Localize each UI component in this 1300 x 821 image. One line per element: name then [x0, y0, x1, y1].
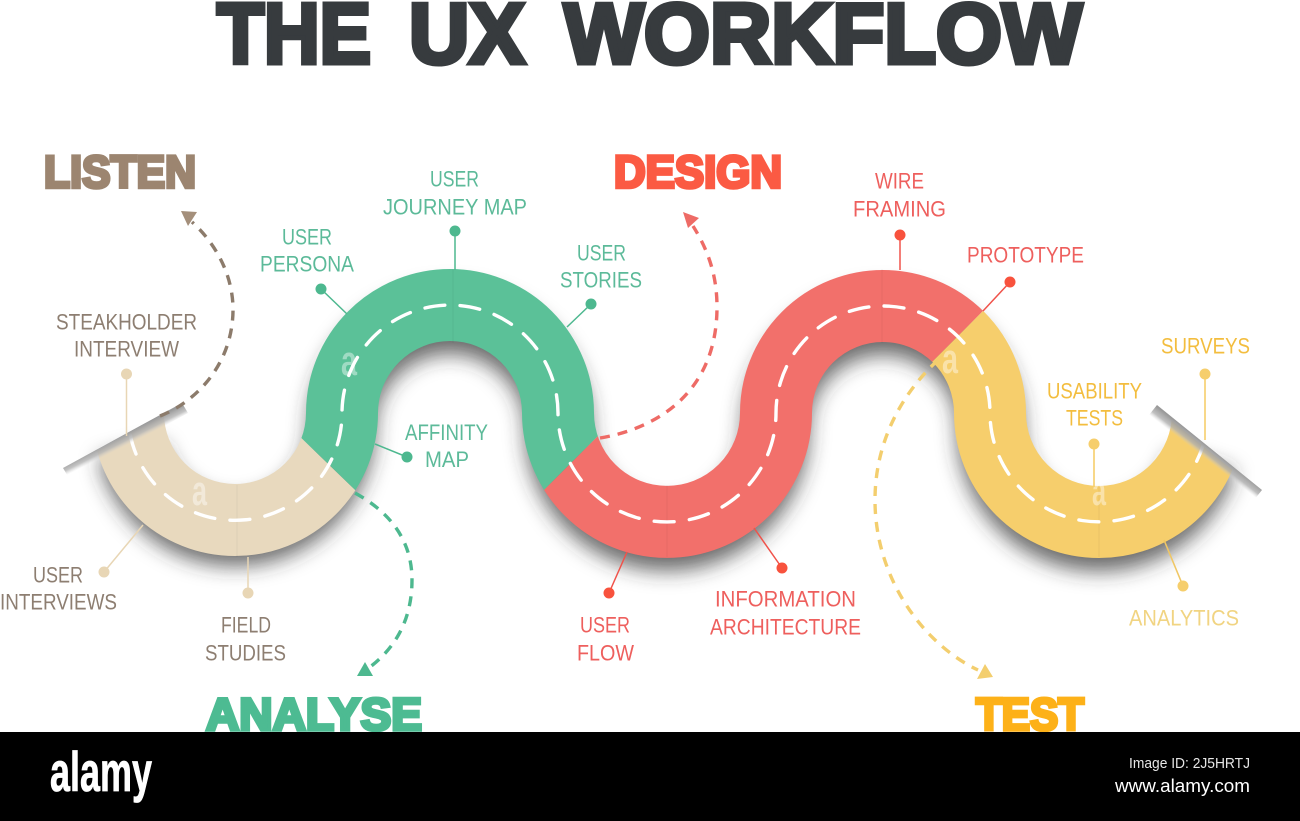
label: wire framing: WIRE [875, 168, 924, 194]
label: usability tests [1047, 378, 1142, 487]
road end barrier: right [1149, 405, 1262, 500]
footer band [0, 732, 1300, 821]
label: information architecture: ARCHITECTURE [710, 614, 861, 640]
label: analytics: ANALYTICS [1129, 606, 1239, 630]
arrow: to listen [160, 211, 233, 416]
watermark glyphs on road: a [192, 467, 207, 514]
heading: design: DESIGN [614, 146, 782, 198]
watermark glyphs on road: a [1092, 467, 1106, 514]
road segment: listen [98, 419, 356, 556]
label: analytics [1129, 540, 1239, 630]
label: field studies: FIELD [221, 612, 271, 638]
label: user flow [577, 552, 634, 666]
label: usability tests: USABILITY [1047, 378, 1142, 404]
label: affinity map: AFFINITY [405, 420, 488, 445]
label: user journey map [383, 166, 527, 270]
label: user journey map: USER [430, 166, 479, 192]
label: wire framing: FRAMING [853, 196, 946, 222]
label: user persona [260, 224, 354, 314]
road segment: design [544, 270, 983, 558]
label: user stories: USER [577, 240, 626, 266]
label: steakholder interview: INTERVIEW [74, 336, 179, 362]
label: field studies [205, 557, 286, 666]
label: user flow: USER [580, 612, 630, 638]
road segment: test [932, 311, 1232, 558]
label: prototype [967, 242, 1084, 311]
label: wire framing [853, 168, 946, 270]
label: user interviews [0, 525, 143, 614]
road shadow [131, 321, 1203, 538]
label: steakholder interview [56, 310, 197, 436]
label: field studies: STUDIES [205, 640, 286, 666]
label: prototype: PROTOTYPE [967, 242, 1084, 268]
heading: test: TEST [976, 689, 1084, 740]
watermark glyphs on road [192, 335, 1106, 514]
label: user persona: USER [282, 224, 332, 250]
road centre dashes [130, 305, 1203, 522]
label: steakholder interview: STEAKHOLDER [56, 310, 197, 334]
watermark glyphs on road: a [942, 335, 958, 382]
road end barrier: left [63, 403, 188, 478]
label: affinity map [375, 420, 488, 472]
label: information architecture [710, 528, 861, 640]
arrow: to test [875, 360, 993, 679]
winding road [128, 269, 1208, 557]
label: user flow: FLOW [577, 640, 634, 666]
heading: listen: LISTEN [44, 146, 196, 198]
label: user interviews: USER [33, 562, 83, 588]
footer url: www.alamy.com [1114, 776, 1250, 796]
label: affinity map: MAP [425, 447, 469, 472]
arrow: to design [600, 212, 717, 438]
road seams [237, 269, 1099, 557]
label: surveys: SURVEYS [1161, 334, 1250, 358]
label: surveys [1161, 334, 1250, 440]
footer image id: Image ID: 2J5HRTJ [1129, 755, 1250, 772]
label: user stories: STORIES [560, 268, 642, 292]
watermark glyphs on road: a [341, 337, 357, 384]
label: user interviews: INTERVIEWS [0, 590, 117, 614]
label: user stories [560, 240, 642, 327]
arrow: to analyse [355, 493, 412, 676]
label: usability tests: TESTS [1066, 406, 1123, 430]
label: user persona: PERSONA [260, 252, 354, 276]
road segment: analyse [302, 269, 598, 490]
heading: analyse: ANALYSE [206, 689, 422, 740]
label: user journey map: JOURNEY MAP [383, 194, 527, 220]
footer logo: alamy [50, 740, 152, 803]
title [217, 0, 1083, 82]
label: information architecture: INFORMATION [715, 586, 856, 612]
